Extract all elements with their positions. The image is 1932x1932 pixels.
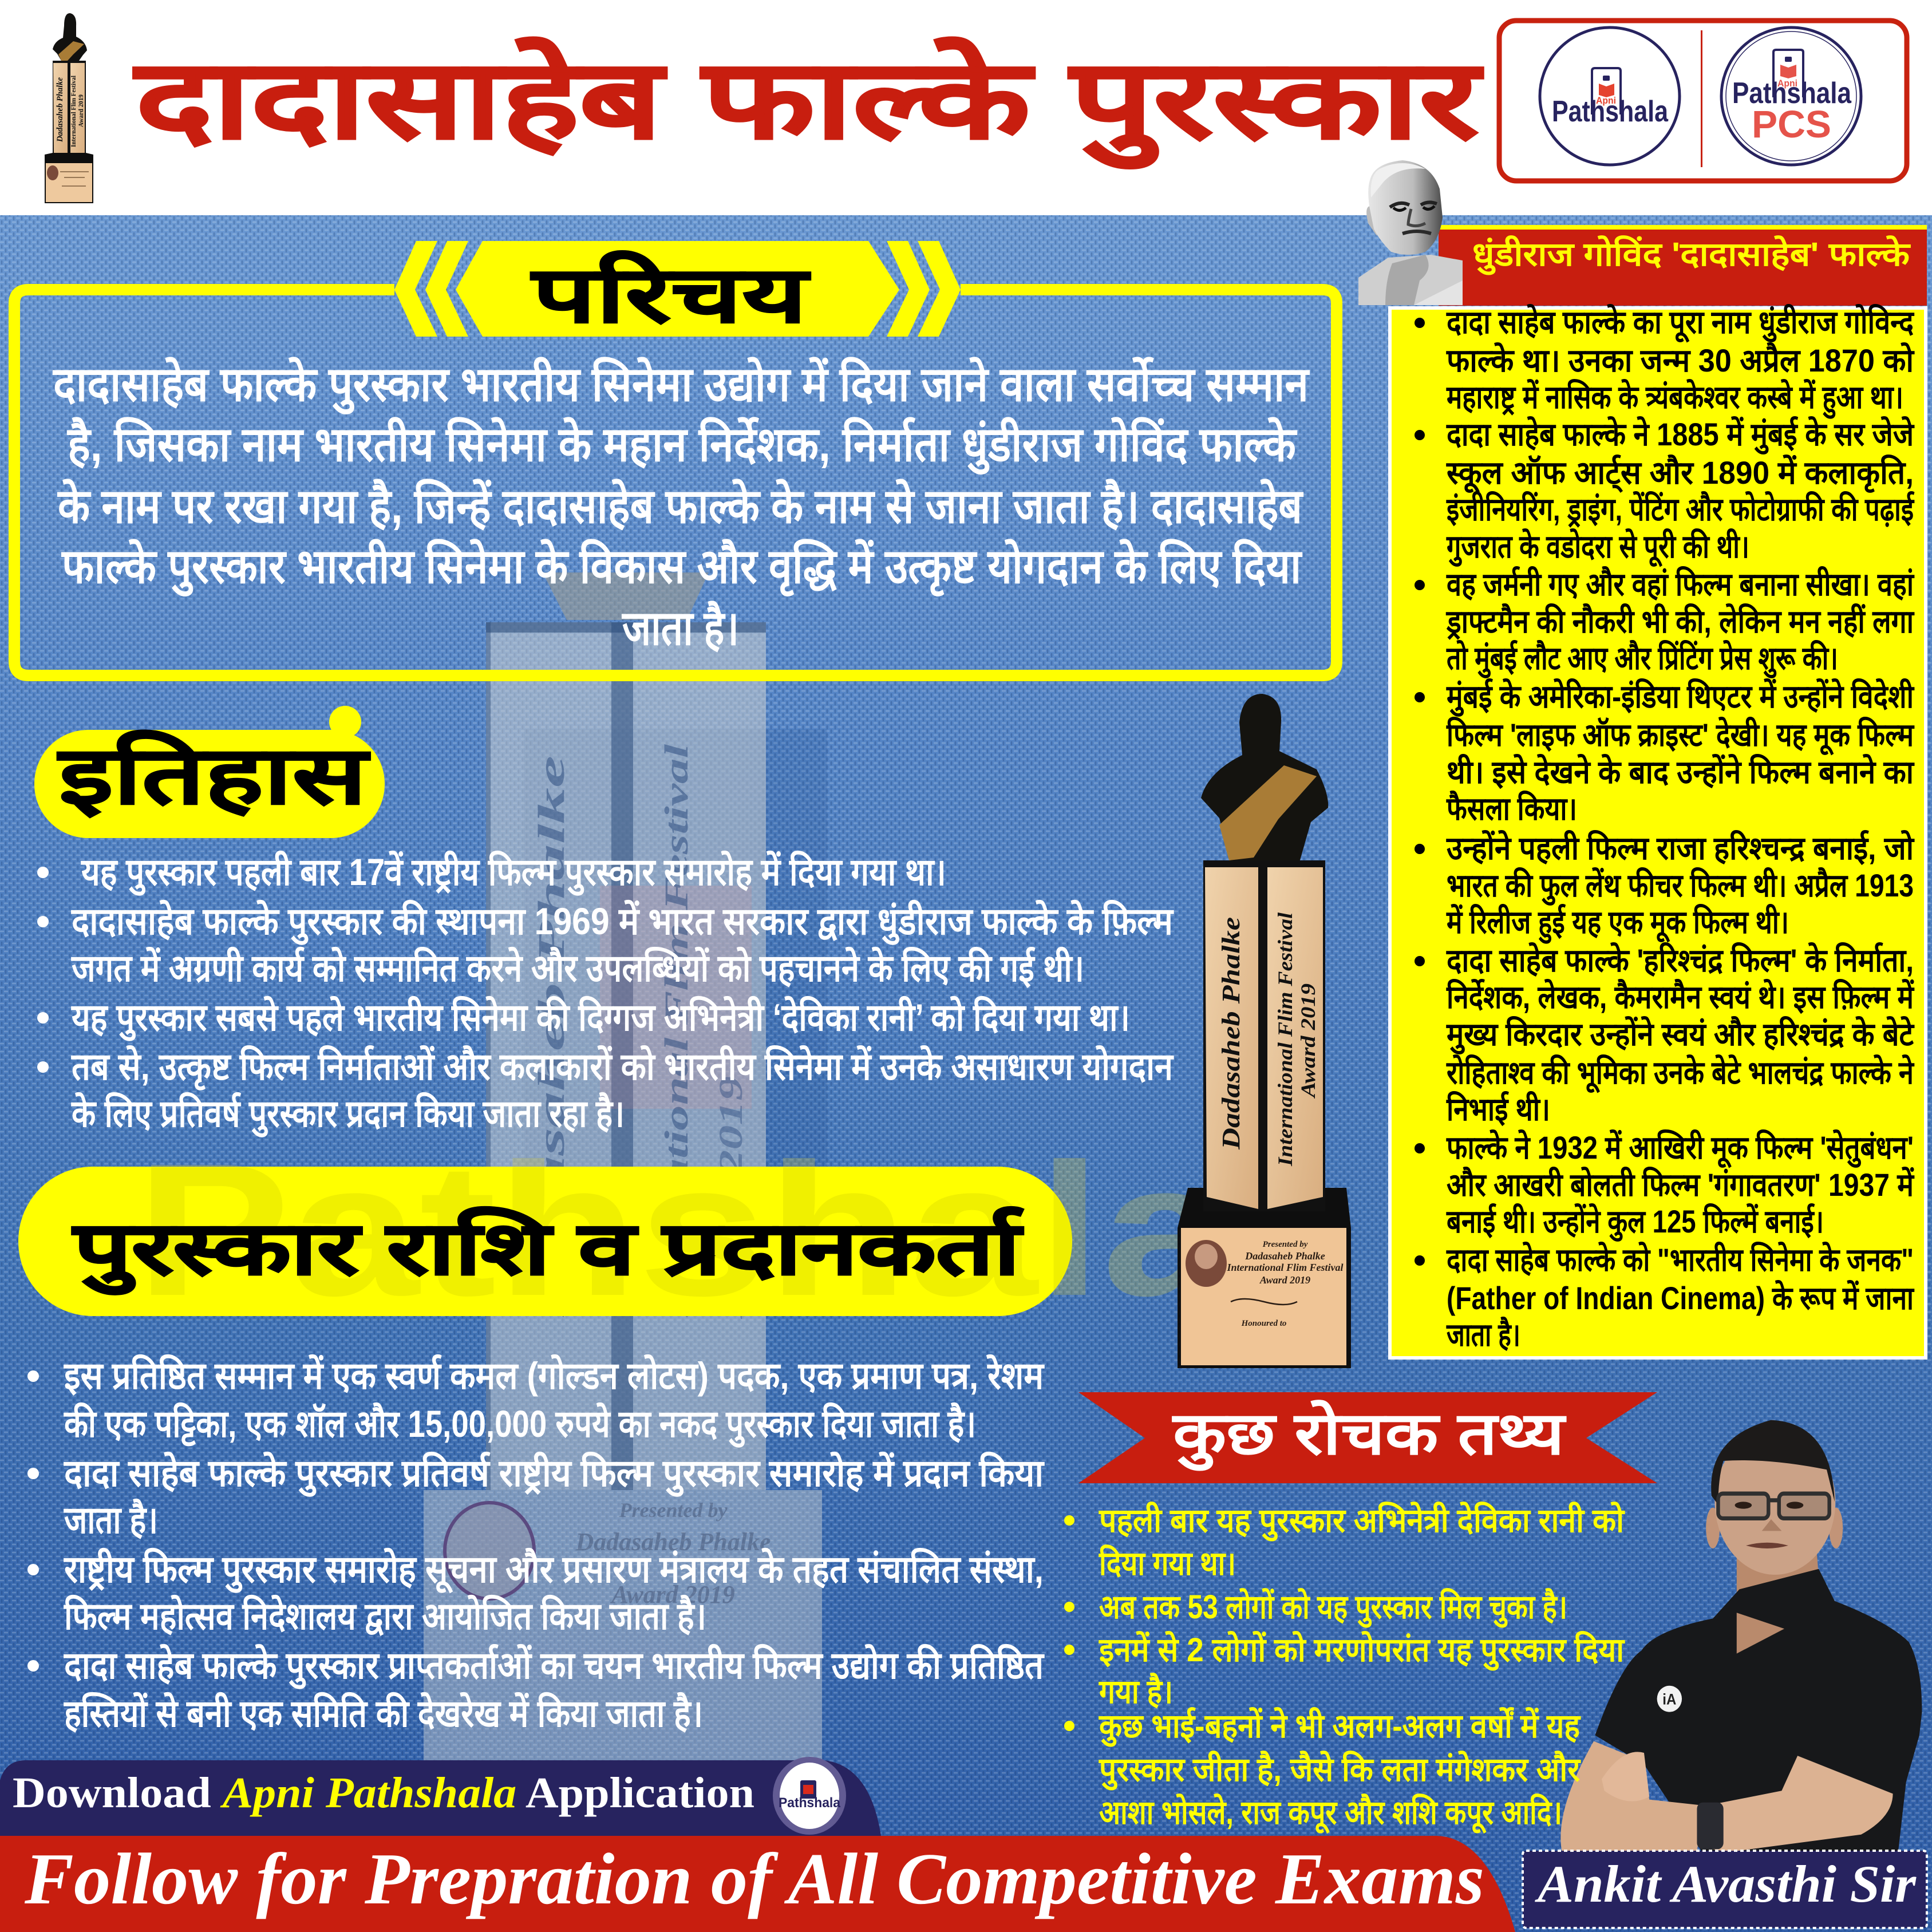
heading: history: [34, 706, 385, 838]
text block: prize bullets: जाता है।: [63, 1498, 158, 1541]
text block: prize bullets: दादा साहेब फाल्के पुरस्कार प्राप्तकर्ताओं का चयन भारतीय फिल्म उद्योग की प्रतिष्ठित: [63, 1643, 1045, 1689]
watermark: faded trophy and brand: Dadasaheb Phalke: [531, 756, 572, 1318]
heading banner: introduction: परिचय: [530, 251, 811, 338]
logo: app: Pathshala: [779, 1795, 841, 1811]
icon: small trophy in header: International Flim Festival: [69, 75, 77, 147]
text block: interesting facts: आशा भोसले, राज कपूर और शशि कपूर आदि।: [1099, 1793, 1562, 1834]
bullet: father of Indian cinema: जाता है।: [1446, 1316, 1520, 1353]
photo: presenter: [1560, 1420, 1922, 1852]
logo: Pathshala PCS: [1721, 27, 1861, 165]
introduction text: [52, 357, 1310, 655]
logo: Pathshala PCS: Apni: [1777, 78, 1797, 89]
panel: presenter name: Ankit Avasthi Sir: [1535, 1855, 1917, 1913]
icon: large trophy: Dadasaheb Phalke: [1244, 1250, 1325, 1262]
icon: large trophy: Award 2019: [1297, 983, 1319, 1099]
watermark: faded trophy and brand: Award 2019: [610, 1581, 735, 1609]
icon: large trophy: Presented by: [1263, 1240, 1308, 1249]
panel: download app bar: [0, 1757, 881, 1836]
bullet: last films: [1415, 1129, 1915, 1242]
text block: interesting facts: दिया गया था।: [1099, 1544, 1236, 1582]
icon: large trophy: Dadasaheb Phalke: [1217, 917, 1245, 1150]
icon: large trophy: Award 2019: [1259, 1274, 1310, 1286]
introduction text: जाता है।: [621, 600, 739, 655]
bullet: last films: बनाई थी। उन्होंने कुल 125 फिल्में बनाई।: [1446, 1203, 1824, 1242]
logo: Pathshala PCS: PCS: [1752, 103, 1831, 146]
watermark: faded trophy and brand: Pathshala: [136, 1124, 1232, 1335]
icon: small trophy in header: Award 2019: [77, 94, 85, 127]
panel: introduction box: [14, 241, 1337, 675]
heading: prize money and presenter: Pathshala: [136, 1124, 1232, 1335]
logo: Apni Pathshala: [1540, 27, 1680, 165]
bullet: roles in the film: [1415, 942, 1915, 1127]
text block: interesting facts: गया है।: [1099, 1673, 1173, 1710]
icon: large trophy: International Flim Festival: [1274, 912, 1297, 1167]
bullet: Germany: तो मुंबई लौट आए और प्रिंटिंग प्रेस शुरू की।: [1446, 639, 1838, 678]
bullet: Raja Harishchandra: में रिलीज हुई यह एक मूक फिल्म थी।: [1446, 903, 1789, 944]
bullet: Germany: [1415, 566, 1915, 678]
text block: prize bullets: हस्तियों से बनी एक समिति की देखरेख में किया जाता है।: [63, 1692, 703, 1735]
panel: follow bar: Follow for Prepration of All Competitive Exams: [24, 1838, 1484, 1919]
icon: large trophy: International Flim Festival: [1226, 1262, 1344, 1273]
text block: interesting facts: पहली बार यह पुरस्कार अभिनेत्री देविका रानी को: [1099, 1502, 1625, 1542]
panel: logos: [1499, 21, 1907, 181]
watermark: faded trophy and brand: [136, 572, 1232, 1760]
heading: prize money and presenter: पुरस्कार राशि व प्रदानकर्ता: [72, 1207, 1024, 1295]
icon: small trophy in header: [45, 13, 93, 203]
text block: prize bullets: राष्ट्रीय फिल्म पुरस्कार समारोह सूचना और प्रसारण मंत्रालय के तहत संचालित संस्था,: [63, 1547, 1044, 1594]
text block: prize bullets: फिल्म महोत्सव निदेशालय द्वारा आयोजित किया जाता है।: [63, 1594, 706, 1637]
bullet: full name and birth: [1415, 303, 1915, 419]
introduction text: के नाम पर रखा गया है, जिन्हें दादासाहेब फाल्के के नाम से जाना जाता है। दादासाहेब: [57, 479, 1304, 533]
text block: interesting facts: इनमें से 2 लोगों को मरणोपरांत यह पुरस्कार दिया: [1099, 1631, 1625, 1671]
text block: prize bullets: की एक पट्टिका, एक शॉल और 15,00,000 रुपये का नकद पुरस्कार दिया जाता है।: [63, 1402, 976, 1448]
label: founder name: धुंडीराज गोविंद 'दादासाहेब' फाल्के: [1472, 235, 1911, 275]
text block: history bullets: के लिए प्रतिवर्ष पुरस्कार प्रदान किया जाता रहा है।: [70, 1092, 625, 1137]
bullet: education: गुजरात के वडोदरा से पूरी की थी।: [1446, 528, 1749, 567]
text block: interesting facts: [1064, 1502, 1625, 1834]
panel: biography: [1390, 303, 1926, 1358]
heading: history: इतिहास: [57, 730, 370, 820]
introduction text: है, जिसका नाम भारतीय सिनेमा के महान निर्देशक, निर्माता धुंडीराज गोविंद फाल्के: [66, 417, 1298, 475]
introduction text: दादासाहेब फाल्के पुरस्कार भारतीय सिनेमा उद्योग में दिया जाने वाला सर्वोच्च सम्मान: [52, 357, 1310, 414]
label: founder name: [1439, 225, 1927, 306]
header background: [0, 0, 1932, 215]
ribbon heading: interesting facts: कुछ रोचक तथ्य: [1172, 1400, 1567, 1471]
bullet: Life of Christ: [1415, 678, 1915, 827]
text block: history bullets: यह पुरस्कार सबसे पहले भारतीय सिनेमा की दिग्गज अभिनेत्री ‘देविका रानी’ को दिया गया था।: [70, 995, 1130, 1041]
logo: Apni Pathshala: Apni: [1596, 95, 1616, 106]
photo: presenter: iA: [1662, 1691, 1676, 1708]
ribbon heading: interesting facts: [1078, 1392, 1657, 1483]
text block: history bullets: जगत में अग्रणी कार्य को सम्मानित करने और उपलब्धियों को पहचानने के लिए की गई थी।: [70, 946, 1084, 989]
bullet: education: [1415, 416, 1915, 567]
text block: history bullets: तब से, उत्कृष्ट फिल्म निर्माताओं और कलाकारों को भारतीय सिनेमा में उनके असाधारण योगदान: [70, 1045, 1174, 1091]
watermark: faded trophy and brand: Presented by: [619, 1499, 728, 1522]
text block: prize bullets: [27, 1354, 1045, 1735]
text block: prize bullets: दादा साहेब फाल्के पुरस्कार प्रतिवर्ष राष्ट्रीय फिल्म पुरस्कार समारोह में प्रदान किया: [63, 1451, 1045, 1497]
bullet: father of Indian cinema: [1415, 1241, 1915, 1353]
logo: Pathshala PCS: Pathshala: [1732, 77, 1852, 110]
bullet: education: स्कूल ऑफ आर्ट्स और 1890 में कलाकृति,: [1446, 454, 1914, 493]
logo: Apni Pathshala: Pathshala: [1552, 95, 1669, 128]
heading: prize money and presenter: [18, 1167, 1072, 1316]
text block: history bullets: यह पुरस्कार पहली बार 17वें राष्ट्रीय फिल्म पुरस्कार समारोह में दिया गया था।: [80, 850, 946, 896]
text block: history bullets: दादासाहेब फाल्के पुरस्कार की स्थापना 1969 में भारत सरकार द्वारा धुंडीराज फाल्के के फ़िल्म: [70, 899, 1174, 945]
watermark: faded trophy and brand: International Flim Festival: [658, 744, 695, 1318]
watermark: faded trophy and brand: Award 2019: [712, 1076, 749, 1319]
logo: app: [773, 1757, 846, 1835]
bullet: Raja Harishchandra: [1415, 829, 1915, 944]
bullet: Life of Christ: फैसला किया।: [1446, 790, 1577, 827]
panel: download app bar: Download Apni Pathshala Application: [13, 1769, 754, 1817]
text block: interesting facts: पुरस्कार जीता है, जैसे कि लता मंगेशकर और: [1099, 1751, 1581, 1791]
introduction text: फाल्के पुरस्कार भारतीय सिनेमा के विकास और वृद्धि में उत्कृष्ट योगदान के लिए दिया: [61, 539, 1303, 596]
text block: interesting facts: कुछ भाई-बहनों ने भी अलग-अलग वर्षों में यह: [1099, 1707, 1581, 1747]
icon: large trophy: [1178, 694, 1351, 1368]
text block: interesting facts: अब तक 53 लोगों को यह पुरस्कार मिल चुका है।: [1099, 1588, 1567, 1628]
title: दादासाहेब फाल्के पुरस्कार: [133, 37, 1484, 169]
panel: presenter name: [1523, 1851, 1927, 1928]
icon: small trophy in header: Dadasaheb Phalke: [56, 77, 65, 143]
watermark: faded trophy and brand: Dadasaheb Phalke: [575, 1528, 771, 1556]
text block: prize bullets: इस प्रतिष्ठित सम्मान में एक स्वर्ण कमल (गोल्डन लोटस) पदक, एक प्रमाण पत्र, रेशम: [63, 1354, 1045, 1397]
icon: large trophy: Honoured to: [1241, 1319, 1286, 1328]
portrait: Dhundiraj Govind Phalke sketch: [1358, 160, 1463, 305]
bullet: roles in the film: निभाई थी।: [1446, 1091, 1550, 1127]
text block: history bullets: [37, 850, 1174, 1137]
heading banner: introduction: [394, 241, 961, 338]
